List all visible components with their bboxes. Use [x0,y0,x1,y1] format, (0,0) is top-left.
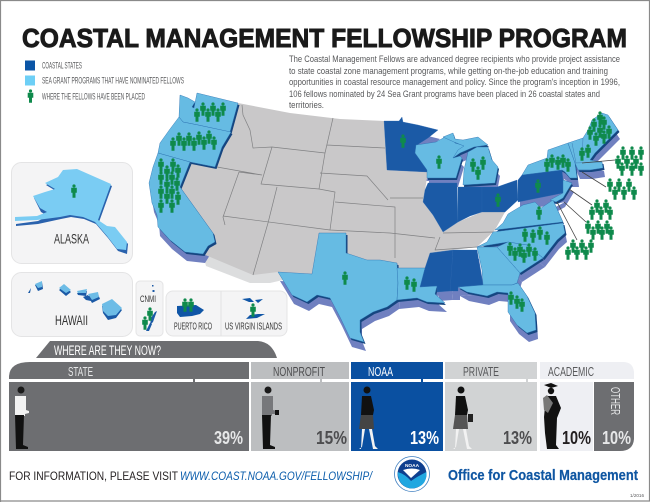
title: COASTAL MANAGEMENT FELLOWSHIP PROGRAM [22,25,627,53]
category: private: 13% [503,428,532,448]
category: private [445,362,537,451]
heading text: WHERE ARE THEY NOW? [54,343,161,358]
category: state: 39% [214,428,243,448]
category: nonprofit [251,362,349,451]
category: academic [540,362,634,451]
intro text [289,54,620,111]
panel: Puerto Rico and US Virgin Islands [166,291,287,336]
heading tab [36,341,277,358]
category: nonprofit: 15% [316,428,347,448]
grey base extrusion [203,254,283,283]
map of the United States [149,93,644,351]
category: nonprofit: NONPROFIT [273,365,325,379]
panel: where are they now [9,341,634,451]
grey inland states [180,103,505,275]
category: academic: 10% [562,428,591,448]
category: NOAA: NOAA [368,365,393,379]
category: private: PRIVATE [463,365,499,379]
category: state: STATE [68,365,93,379]
category: NOAA: 13% [410,428,439,448]
leader lines [557,160,615,240]
panel: Hawaii [12,272,132,336]
category: other [594,382,634,451]
grey state lines [217,105,495,275]
dark coastal states [384,117,572,292]
footer: url: WWW.COAST.NOAA.GOV/FELLOWSHIP/ [180,469,373,483]
intro text: territories. [289,100,324,111]
icon: NOAA logo: NOAA [405,463,420,468]
category: other: 10% [602,428,631,448]
date note: 1/2016 [630,493,645,498]
label: CNMI: CNMI [140,294,156,304]
icon: NOAA logo [394,456,430,492]
category: academic: ACADEMIC [548,365,594,379]
panel: CNMI [136,281,163,336]
legend label: sea grant: SEA GRANT PROGRAMS THAT HAVE NOMINATED FELLOWS [42,76,184,86]
legend swatch: coastal states [25,60,35,70]
legend icon: fellow [28,89,33,103]
coast extrusion [151,102,620,351]
category: other: OTHER [608,387,622,415]
label: Hawaii: HAWAII [55,312,88,328]
legend swatch: sea grant [25,76,35,86]
label: Alaska: ALASKA [54,230,89,246]
label: Puerto Rico: PUERTO RICO [174,320,212,332]
legend label: fellows placed: WHERE THE FELLOWS HAVE BEEN PLACED [42,92,145,102]
category: NOAA [351,362,443,451]
label: US Virgin Islands: US VIRGIN ISLANDS [225,320,282,332]
legend [25,60,184,103]
legend: COASTAL STATES [42,60,82,72]
fellows icons [158,102,644,312]
sea grant states [149,93,618,342]
footer: information link: FOR INFORMATION, PLEASE VISIT [9,469,179,483]
panel: Alaska [12,162,132,264]
category: state [9,362,249,451]
